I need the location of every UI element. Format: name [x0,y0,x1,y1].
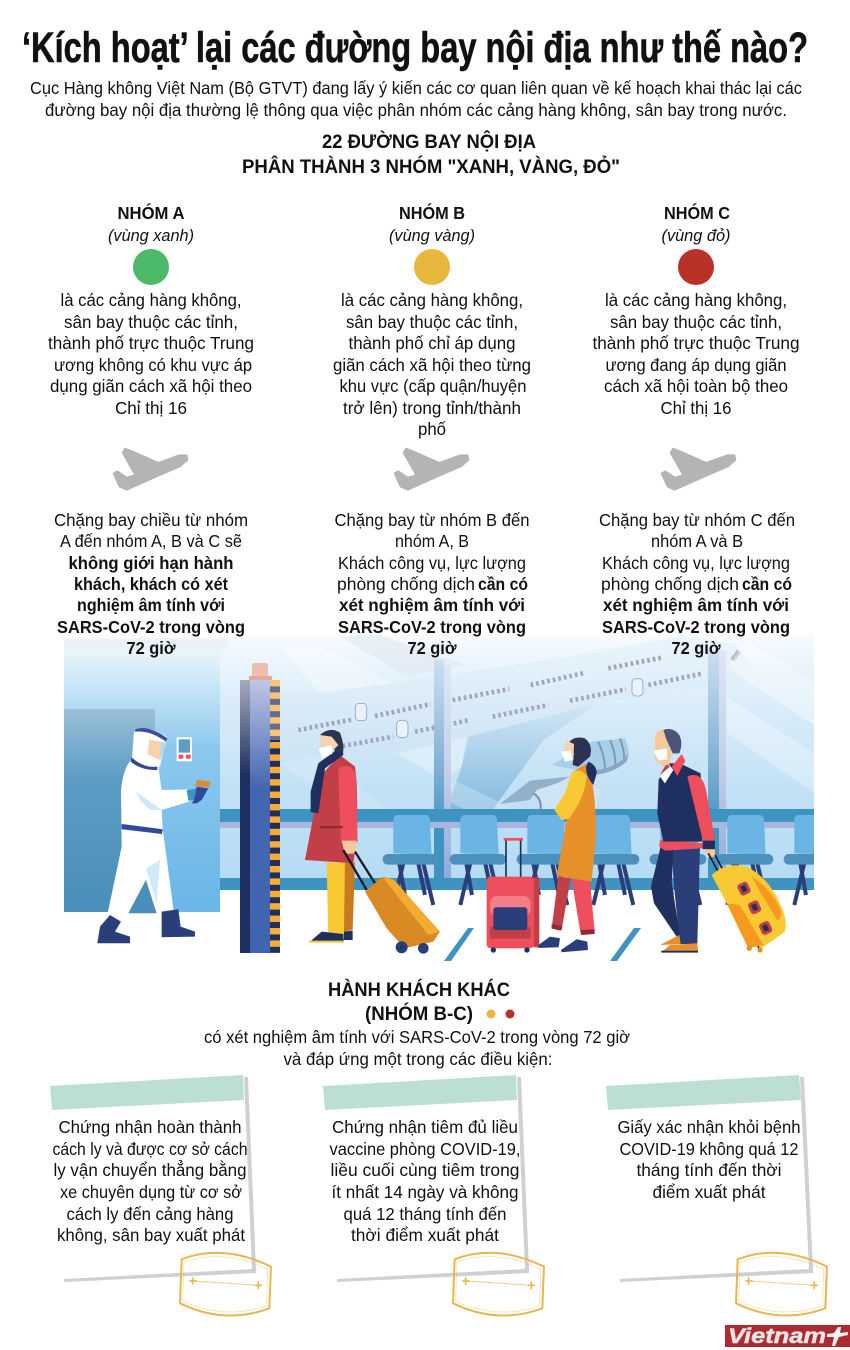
group C flight rule: Chặng bay từ nhóm C đến [599,510,795,530]
card 1: quarantine certificate [50,1075,271,1316]
group C flight rule: phòng chống dịch [601,574,739,594]
green circle [133,249,169,285]
red circle [678,249,714,285]
group B flight rule: xét nghiệm âm tính với [339,595,525,615]
card 3: recovery certificate: COVID-19 không quá 12 [620,1139,798,1159]
group B heading: NHÓM B [399,202,465,223]
group A flight rule: A đến nhóm A, B và C sẽ [60,531,242,551]
group C heading: NHÓM C [664,202,730,223]
section heading [242,131,620,178]
group A definition [48,290,254,418]
card 1: quarantine certificate: Chứng nhận hoàn thành [58,1117,242,1137]
card 3: recovery certificate [606,1075,827,1316]
group C flight rule: cần có [742,574,792,594]
group C definition: Chỉ thị 16 [660,398,732,418]
group A definition: ương không có khu vực áp [54,355,252,375]
group B flight rule: phòng chống dịch [337,574,475,594]
conditions intro text: và đáp ứng một trong các điều kiện: [284,1049,552,1069]
intro paragraph: Cục Hàng không Việt Nam (Bộ GTVT) đang lấy ý kiến các cơ quan liên quan về kế hoạch khai thác lại các [30,78,802,98]
icon: face mask stamp [453,1253,544,1316]
group B definition: giãn cách xã hội theo từng [333,355,531,375]
panel: group C [592,202,800,658]
group C definition: sân bay thuộc các tỉnh, [610,312,782,332]
icon: airplane [394,448,469,490]
group A flight rule: nghiệm âm tính với [77,595,225,615]
group C definition: ương đang áp dụng giãn [606,355,786,375]
lower diagonal [311,785,389,809]
group B flight rule: cần có [478,574,528,594]
conditions intro text: có xét nghiệm âm tính với SARS-CoV-2 trong vòng 72 giờ [204,1027,630,1047]
group C definition: thành phố trực thuộc Trung [592,333,800,353]
card 1: quarantine certificate: cách ly và được cơ sở cách [52,1139,248,1159]
group B subtitle: (vùng vàng) [389,227,475,245]
card 2: vaccination certificate: Chứng nhận tiêm đủ liều [332,1117,518,1137]
card 3: recovery certificate: điểm xuất phát [652,1182,766,1202]
wing [447,704,597,809]
icon: face mask stamp [736,1253,827,1316]
conditions intro text [204,1027,630,1069]
group A flight rule [54,510,248,658]
logo: Vietnam+: Vietnam [728,1325,826,1348]
card 1: quarantine certificate: không, sân bay xuất phát [57,1225,245,1245]
card 1: quarantine certificate: cách ly đến cảng hàng [66,1204,234,1224]
panel: group B [333,202,531,658]
group B definition: là các cảng hàng không, [341,290,523,310]
group C flight rule: Khách công vụ, lực lượng [602,553,790,573]
group B definition: sân bay thuộc các tỉnh, [346,312,518,332]
upper gray tail shape [340,635,460,667]
group A flight rule: Chặng bay chiều từ nhóm [54,510,248,530]
group B definition: trở lên) trong tỉnh/thành [343,398,521,418]
group A definition: là các cảng hàng không, [60,290,242,310]
card 2: vaccination certificate: quá 12 tháng tính đến [344,1204,506,1224]
group A definition: sân bay thuộc các tỉnh, [64,312,238,332]
logo: Vietnam+ [725,1325,850,1348]
group C flight rule [599,510,795,658]
group B definition: phố [418,419,446,439]
other passengers heading: HÀNH KHÁCH KHÁC [328,979,510,1001]
card 1: quarantine certificate: xe chuyên dụng từ cơ sở [60,1182,242,1202]
light strips at right [727,697,814,793]
fuselage [550,637,738,660]
airplane outside window [220,635,814,809]
card 2: vaccination certificate: ít nhất 14 ngày và không [332,1182,518,1202]
card 2: vaccination certificate: liều cuối cùng tiêm trong [330,1160,520,1180]
group C subtitle: (vùng đỏ) [662,227,730,245]
scanner pillar [240,663,280,953]
group A definition: thành phố trực thuộc Trung [48,333,254,353]
window posts [434,660,444,878]
group C flight rule: 72 giờ [672,638,721,658]
yellow circle [414,249,450,285]
group B flight rule: 72 giờ [408,638,457,658]
group B flight rule: Khách công vụ, lực lượng [338,553,526,573]
section heading: PHÂN THÀNH 3 NHÓM "XANH, VÀNG, ĐỎ" [242,156,620,178]
passenger in red coat with yellow suitcase [305,730,440,954]
card 2: vaccination certificate: vaccine phòng COVID-19, [330,1139,520,1159]
engine [552,738,629,770]
icon: face mask stamp [180,1253,271,1316]
seats [383,815,840,905]
cabin window rows [298,657,703,746]
group A flight rule: SARS-CoV-2 trong vòng [57,617,245,637]
left wall [64,640,220,912]
passenger in yellow coat [538,737,597,952]
airport scene illustration [64,635,840,961]
intro paragraph: đường bay nội địa thường lệ thông qua việc phân nhóm các cảng hàng không, sân bay trong nước. [45,100,787,120]
window rails [220,809,814,822]
floor line markers [444,928,474,961]
group A flight rule: khách, khách có xét [74,574,228,594]
card 2: vaccination certificate [323,1075,544,1316]
group B definition [333,290,531,439]
icon: airplane [113,448,188,490]
group C definition: cách xã hội toàn bộ theo [604,376,788,396]
icon: airplane [661,448,736,490]
group B flight rule: nhóm A, B [395,531,469,551]
group C flight rule: SARS-CoV-2 trong vòng [602,617,790,637]
card 1: quarantine certificate: ly vận chuyển thẳng bằng [54,1159,246,1180]
group B definition: khu vực (cấp quận/huyện [340,376,526,396]
group A flight rule: không giới hạn hành [68,553,234,573]
group B flight rule: Chặng bay từ nhóm B đến [334,510,530,530]
group A heading: NHÓM A [118,202,185,223]
section heading: 22 ĐƯỜNG BAY NỘI ĐỊA [322,131,536,153]
card 3: recovery certificate: tháng tính đến thời [636,1160,782,1180]
red cabin suitcase [487,838,539,953]
group A definition: Chỉ thị 16 [115,398,187,418]
intro paragraph [30,78,802,120]
group C flight rule: xét nghiệm âm tính với [603,595,789,615]
group B flight rule [334,510,530,658]
window background [220,635,814,890]
group A flight rule: 72 giờ [126,638,176,658]
panel: group A [48,202,254,658]
group B flight rule: SARS-CoV-2 trong vòng [338,617,526,637]
other passengers heading: (NHÓM B-C) [365,1003,473,1025]
older passenger in navy vest [651,729,786,953]
group C flight rule: nhóm A và B [651,531,743,551]
group A definition: dụng giãn cách xã hội theo [50,376,252,396]
health worker in protective suit [97,728,211,943]
other passengers heading [328,979,514,1025]
card 2: vaccination certificate: thời điểm xuất phát [351,1225,499,1245]
group C definition [592,290,800,418]
card 3: recovery certificate: Giấy xác nhận khỏi bệnh [618,1117,800,1137]
group A subtitle: (vùng xanh) [108,227,194,245]
group C definition: là các cảng hàng không, [605,290,787,310]
group B definition: thành phố chỉ áp dụng [348,333,516,353]
